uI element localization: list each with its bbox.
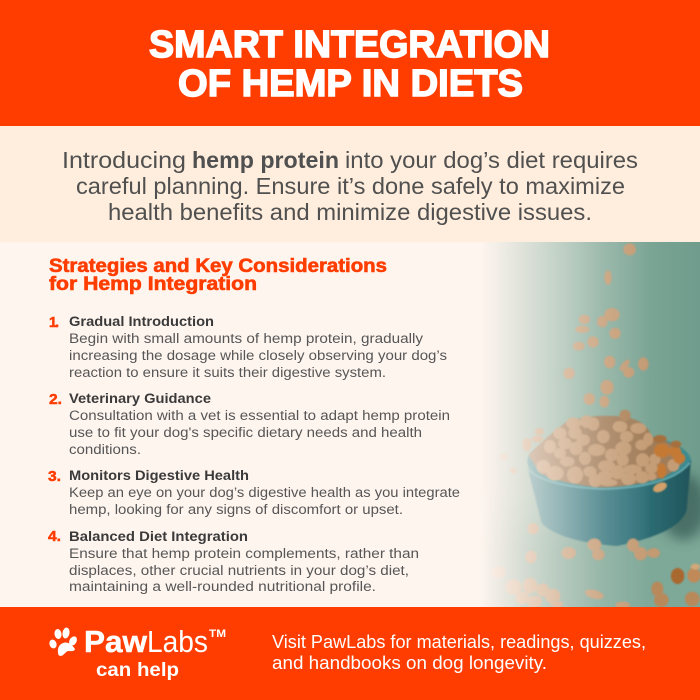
item 2: veterinary guidance: 2.: [49, 392, 62, 408]
photo: dog kibble falling into a bowl: [460, 242, 700, 608]
item 3: monitors digestive health: 3.: [48, 469, 61, 485]
icon: paw: [48, 627, 79, 656]
page background: [0, 242, 700, 607]
section heading: [49, 256, 387, 295]
logo wordmark: Paw: [84, 624, 148, 659]
item 1: gradual introduction: Begin with small amounts of hemp protein, gradually: [69, 331, 424, 347]
kibble pile: [528, 415, 685, 487]
title: OF HEMP IN DIETS: [178, 63, 523, 105]
intro text: health benefits and minimize digestive issues.: [108, 199, 592, 225]
item 4: balanced diet integration: Ensure that hemp protein complements, rather than: [69, 546, 419, 562]
item 4: balanced diet integration: 4.: [48, 529, 61, 545]
item 2: veterinary guidance: [49, 391, 450, 458]
section heading: for Hemp Integration: [49, 274, 257, 295]
intro text: hemp protein: [192, 147, 339, 173]
title: SMART INTEGRATION: [149, 24, 550, 66]
call to action: Visit PawLabs for materials, readings, quizzes,: [272, 632, 646, 652]
photo fade overlay: [460, 242, 700, 607]
item 2: veterinary guidance: Veterinary Guidance: [69, 391, 211, 407]
intro text: into your dog’s diet requires: [345, 147, 638, 173]
section heading: Strategies and Key Considerations: [49, 256, 387, 277]
item 3: monitors digestive health: hemp, looking for any signs of discomfort or upset.: [69, 502, 403, 518]
item 3: monitors digestive health: Keep an eye on your dog’s digestive health as you integrate: [69, 485, 460, 501]
intro text: [62, 147, 638, 225]
item 1: gradual introduction: 1.: [49, 315, 59, 331]
item 3: monitors digestive health: [48, 468, 460, 518]
call to action: [272, 632, 646, 673]
item 4: balanced diet integration: maintaining a well-rounded nutritional profile.: [69, 579, 376, 595]
bowl: [527, 432, 691, 546]
loose kibble: [491, 243, 668, 608]
item 2: veterinary guidance: Consultation with a vet is essential to adapt hemp protein: [69, 408, 450, 424]
item 2: veterinary guidance: use to fit your dog's specific dietary needs and health: [69, 425, 422, 441]
item 4: balanced diet integration: [48, 529, 419, 595]
item 2: veterinary guidance: conditions.: [69, 442, 141, 458]
logo wordmark: TM: [209, 628, 226, 640]
item 4: balanced diet integration: displaces, other crucial nutrients in your dog’s diet,: [69, 563, 409, 579]
item 1: gradual introduction: increasing the dosage while closely observing your dog’s: [69, 348, 447, 364]
title: [149, 24, 550, 105]
call to action: and handbooks on dog longevity.: [272, 653, 547, 673]
item 4: balanced diet integration: Balanced Diet Integration: [69, 529, 248, 545]
header banner: [0, 0, 700, 126]
logo wordmark: [84, 624, 226, 659]
item 1: gradual introduction: [49, 314, 447, 381]
item 1: gradual introduction: reaction to ensure it suits their digestive system.: [69, 365, 386, 381]
bowl shadow: [660, 473, 700, 540]
item 1: gradual introduction: Gradual Introduction: [69, 314, 214, 330]
logo wordmark: Labs: [147, 624, 208, 659]
intro text: Introducing: [62, 147, 186, 173]
intro text: careful planning. Ensure it’s done safely to maximize: [76, 173, 625, 199]
footer banner: [0, 607, 700, 700]
item 3: monitors digestive health: Monitors Digestive Health: [69, 468, 249, 484]
intro panel: [0, 126, 700, 242]
can help: can help: [96, 660, 179, 681]
